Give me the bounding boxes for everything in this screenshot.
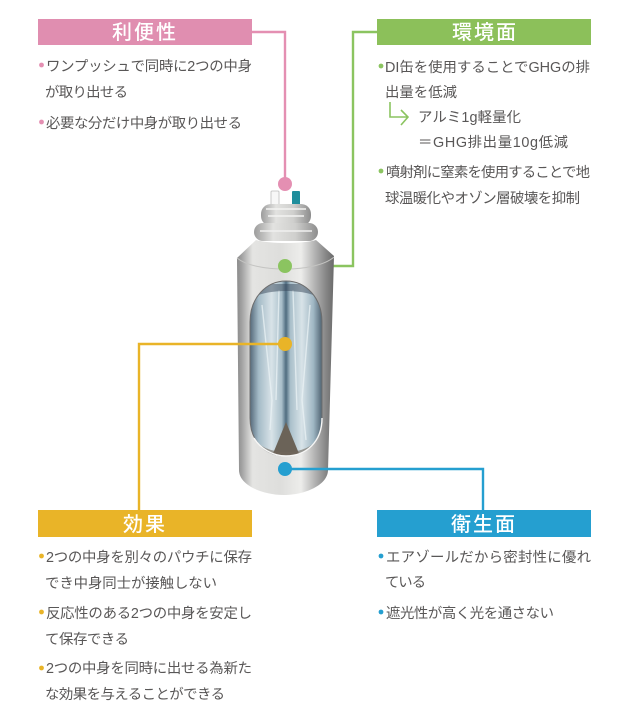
text block: hygiene points: ている [385,575,426,591]
text block: convenience points: ワンプッシュで同時に2つの中身 [46,58,252,75]
heading: environment [377,19,591,45]
icon: green result arrow [390,102,408,125]
panel: environment [377,19,591,207]
text block: effect points: て保存できる [45,631,129,648]
text block: environment points: 球温暖化やオゾン層破壊を抑制 [385,190,580,207]
connector: environment [285,32,377,266]
heading: effect [38,510,252,537]
heading: convenience [38,19,252,45]
marker: yellow dot [278,337,292,351]
text block: environment points: 出量を低減 [385,84,458,101]
text block: environment points: DI缶を使用することでGHGの排 [385,59,590,76]
text block: environment points: 噴射剤に窒素を使用することで地 [386,164,590,181]
connector: hygiene [285,469,483,510]
text block: environment points [379,59,590,207]
text block: effect points: な効果を与えることができる [45,686,225,703]
icon: teal nozzle [292,191,300,205]
connector: effect [139,344,285,510]
marker: pink dot [278,177,292,191]
panel: convenience [38,19,252,132]
text block: hygiene points [379,549,591,622]
window rim [250,281,322,456]
can upper ring [261,204,311,226]
text block: convenience points [39,58,252,132]
panel: effect [38,510,252,703]
can shoulder edge [237,257,334,269]
text block: environment points: アルミ1g軽量化 [418,109,521,126]
heading: convenience: 利便性 [112,21,178,44]
can cutaway window [250,281,322,456]
marker: blue dot [278,462,292,476]
heading: hygiene: 衛生面 [451,513,517,536]
icon: white nozzle [271,191,279,205]
text block: convenience points: が取り出せる [45,84,128,101]
heading: effect: 効果 [123,513,167,536]
window highlight [254,418,322,456]
heading: hygiene [377,510,591,537]
panel: hygiene [377,510,591,622]
text block: effect points [39,549,252,703]
text block: effect points: 2つの中身を別々のパウチに保存 [46,549,252,566]
text block: effect points: でき中身同士が接触しない [45,575,217,592]
aerosol can illustration [237,191,334,495]
text block: effect points: 2つの中身を同時に出せる為新た [46,660,252,677]
text block: hygiene points: エアゾールだから密封性に優れ [386,549,591,566]
text block: environment points: ＝GHG排出量10g低減 [418,134,569,151]
text block: hygiene points: 遮光性が高く光を通さない [386,605,554,622]
can body [237,240,334,495]
heading: environment: 環境面 [452,21,518,44]
connector: convenience [252,32,285,184]
can lower ring [254,223,318,241]
marker: green dot [278,259,292,273]
text block: convenience points: 必要な分だけ中身が取り出せる [46,115,242,132]
text block: effect points: 反応性のある2つの中身を安定し [46,605,252,622]
